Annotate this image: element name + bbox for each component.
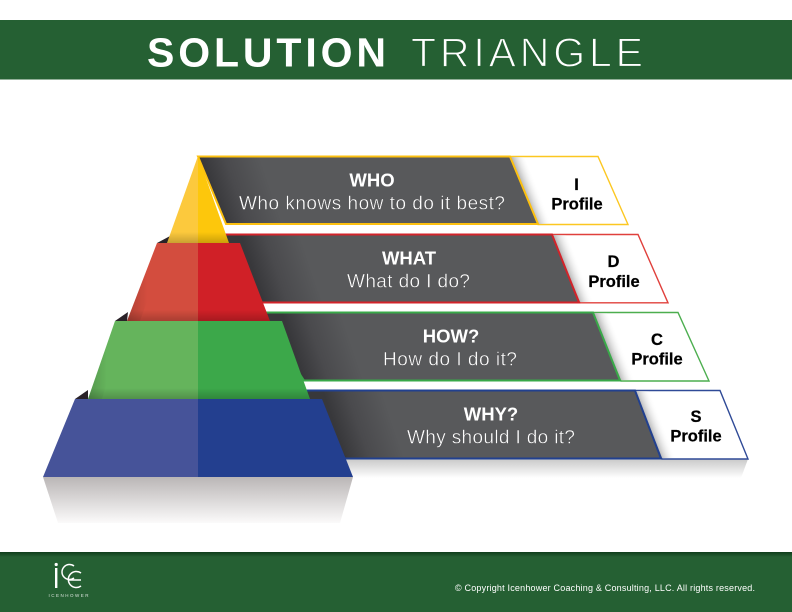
white profile cell: S: S: [690, 408, 702, 426]
white profile cell: C: Profile: [631, 350, 683, 368]
tier: red: [127, 243, 270, 321]
tier: green: [88, 321, 310, 399]
pyramid: [43, 156, 353, 523]
bar: WHY: [300, 390, 748, 459]
dark cell: what: What do I do?: [347, 272, 470, 292]
white profile cell: S: Profile: [670, 428, 722, 446]
logo: ICENHOWER: [48, 593, 89, 598]
shadow beneath blue bar: [345, 459, 748, 478]
copyright: © Copyright Icenhower Coaching & Consulting, LLC. All rights reserved.: [455, 583, 755, 593]
dark cell: why: WHY?: [464, 404, 518, 424]
white profile cell: I: I: [574, 176, 579, 194]
title banner: [0, 20, 792, 80]
dark cell: how: HOW?: [423, 326, 479, 346]
dark cell: what: WHAT: [382, 248, 437, 268]
dark cell: how: How do I do it?: [383, 350, 517, 370]
white profile cell: D: Profile: [588, 273, 640, 291]
dark cell: why: [300, 390, 661, 458]
logo: [48, 563, 89, 598]
title: TRIANGLE: [411, 30, 643, 76]
bar: WHO: [198, 156, 628, 224]
bar: WHAT: [222, 234, 668, 303]
tier: yellow: [167, 156, 229, 243]
dark cell: what: [222, 234, 579, 302]
white profile cell: C: [593, 312, 709, 381]
white profile cell: I: Profile: [551, 196, 603, 214]
dark cell: who: WHO: [349, 170, 395, 190]
white profile cell: C: C: [651, 331, 663, 349]
title: SOLUTION: [147, 30, 386, 76]
white profile cell: I: [510, 156, 628, 224]
bar: HOW: [260, 312, 709, 381]
tier shadow wedges: [75, 235, 172, 399]
tier: blue: [43, 399, 353, 477]
white profile cell: D: D: [608, 253, 620, 271]
dark cell: why: Why should I do it?: [407, 428, 575, 448]
dark cell: how: [260, 312, 620, 380]
footer band: [0, 552, 792, 612]
white profile cell: D: [552, 234, 668, 303]
pyramid reflection: [43, 477, 353, 523]
title: [147, 30, 643, 76]
dark cell: who: [198, 156, 538, 224]
white profile cell: S: [635, 390, 748, 459]
dark cell: who: Who knows how to do it best?: [239, 194, 505, 214]
